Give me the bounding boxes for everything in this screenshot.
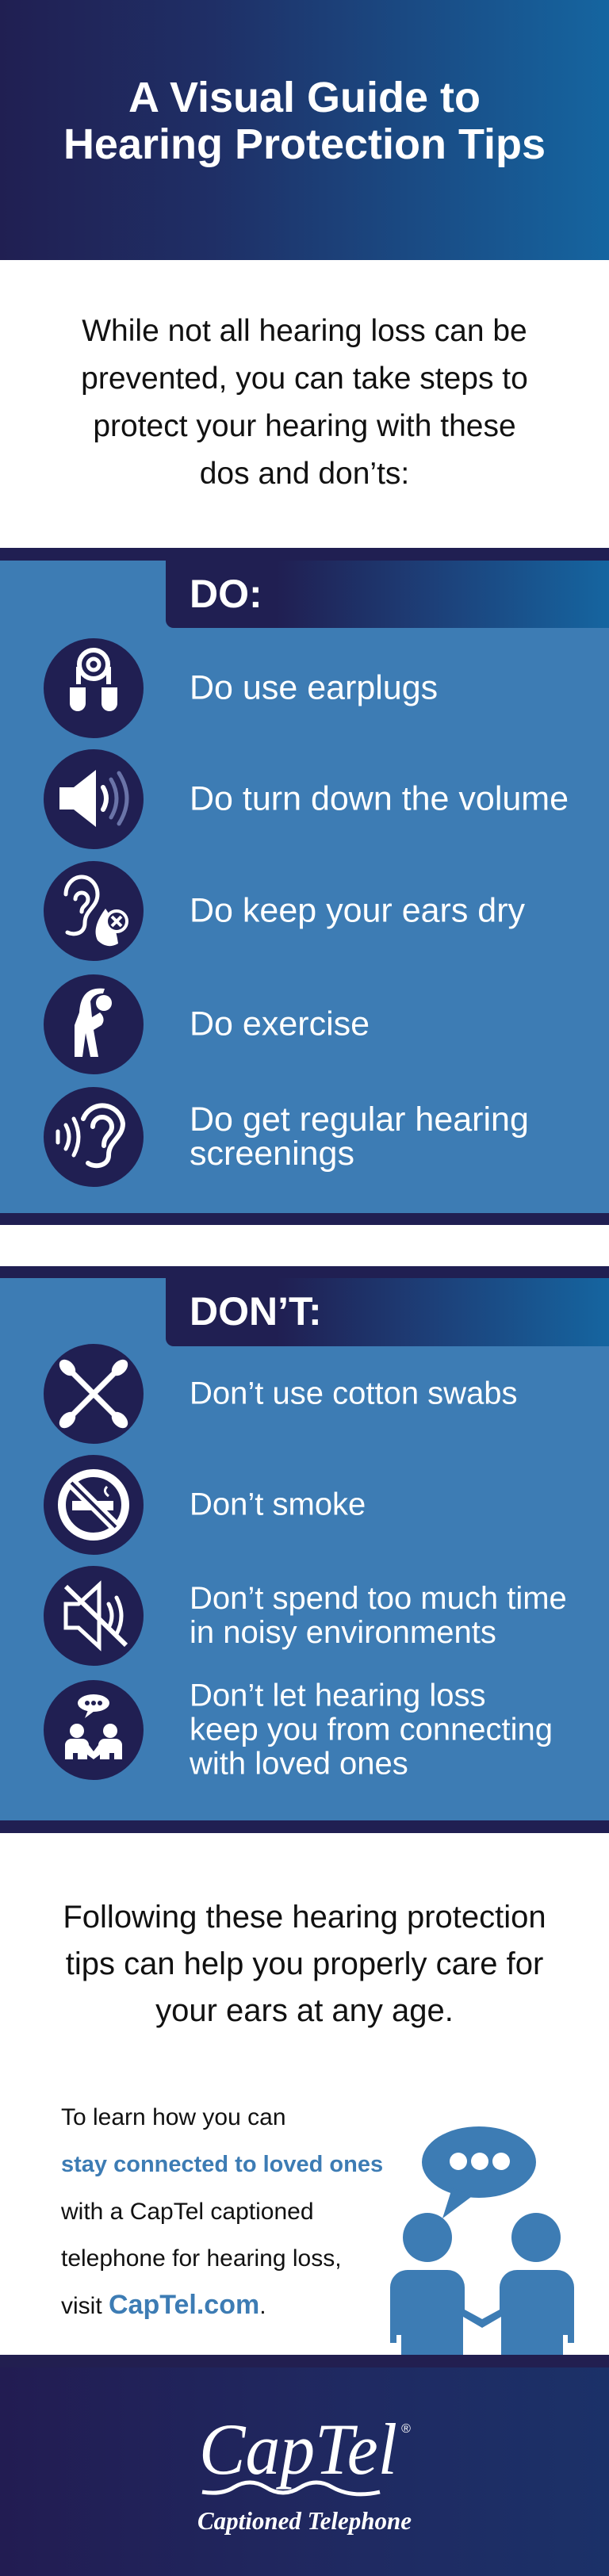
logo: CapTel: ® [401, 2422, 411, 2436]
intro text: protect your hearing with these [93, 409, 516, 443]
intro text: prevented, you can take steps to [81, 362, 528, 396]
title: Hearing Protection Tips [63, 121, 546, 168]
intro text [81, 314, 528, 491]
footer [0, 2355, 609, 2576]
item: smoke: Don’t smoke [190, 1487, 366, 1522]
icon: stretching person [44, 974, 144, 1074]
item: ears dry [44, 861, 525, 961]
item: volume: Do turn down the volume [190, 780, 569, 818]
closing text: Following these hearing protection [63, 1900, 546, 1935]
closing text: your ears at any age. [155, 1993, 454, 2028]
DON'T heading tag [166, 1278, 609, 1346]
item: cotton swabs [44, 1344, 518, 1444]
item: loved ones: Don’t let hearing loss [190, 1678, 486, 1713]
item: exercise [44, 974, 370, 1074]
item: earplugs [44, 638, 438, 738]
item: noisy: Don’t spend too much time [190, 1581, 567, 1616]
call to action text [61, 2104, 383, 2320]
closing text [63, 1900, 546, 2028]
title [63, 74, 546, 168]
item: hearing screenings: Do get regular hearing [190, 1100, 529, 1139]
item: loved ones: with loved ones [190, 1746, 408, 1781]
call to action text: To learn how you can [61, 2104, 286, 2130]
DO heading tag: DO: [190, 571, 262, 615]
item: ears dry: Do keep your ears dry [190, 891, 525, 929]
icon: muted speaker [44, 1566, 144, 1666]
item: noisy [44, 1566, 567, 1666]
title: A Visual Guide to [128, 74, 481, 121]
item: loved ones: keep you from connecting [190, 1713, 553, 1747]
DON'T panel [0, 1266, 609, 1833]
call to action text: with a CapTel captioned [61, 2199, 314, 2225]
logo: CapTel: Captioned Telephone [197, 2506, 412, 2535]
icon: crossed cotton swabs [44, 1344, 144, 1444]
item: exercise: Do exercise [190, 1005, 370, 1043]
call to action text: stay connected to loved ones [61, 2152, 383, 2177]
call to action text: visit CapTel.com. [61, 2290, 266, 2320]
item: cotton swabs: Don’t use cotton swabs [190, 1376, 518, 1411]
icon: ear with sound waves [44, 1087, 144, 1187]
intro text: While not all hearing loss can be [82, 314, 527, 348]
item: loved ones [44, 1678, 553, 1781]
logo: CapTel: CapTel [199, 2409, 397, 2490]
item: earplugs: Do use earplugs [190, 669, 438, 707]
item: hearing screenings: screenings [190, 1135, 354, 1173]
item: volume [44, 749, 569, 849]
item: noisy: in noisy environments [190, 1615, 496, 1650]
icon: ear with water drop [44, 861, 144, 961]
item: hearing screenings [44, 1087, 529, 1187]
call to action text: telephone for hearing loss, [61, 2245, 342, 2272]
illustration: two people with speech bubble [390, 2126, 574, 2355]
header banner [0, 0, 609, 260]
DON'T heading tag: DON’T: [190, 1289, 322, 1334]
icon: two people talking [44, 1680, 144, 1780]
icon: speaker [44, 749, 144, 849]
item: smoke [44, 1455, 366, 1555]
icon: earplugs [44, 638, 144, 738]
closing text: tips can help you properly care for [66, 1946, 543, 1981]
icon: no smoking [44, 1455, 144, 1555]
intro text: dos and don’ts: [200, 457, 409, 491]
DO heading tag [166, 561, 609, 628]
DO panel [0, 548, 609, 1225]
logo: CapTel [197, 2409, 412, 2535]
